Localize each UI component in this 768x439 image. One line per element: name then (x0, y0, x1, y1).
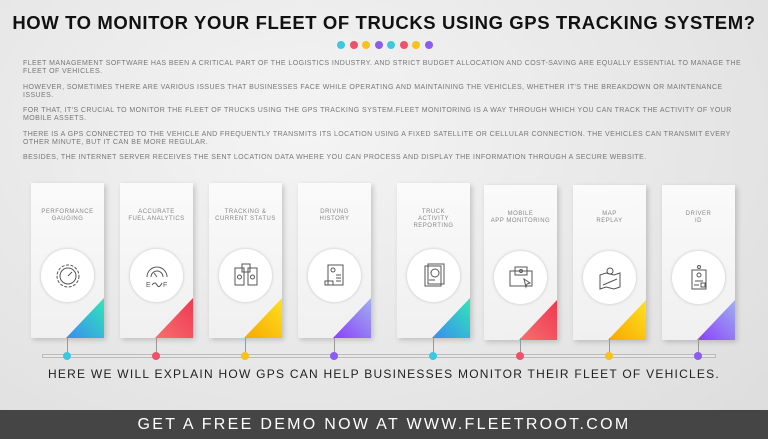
icon: report (407, 249, 460, 302)
icon: fuel gauge (130, 249, 183, 302)
card: tracking (209, 183, 282, 338)
intro text: BESIDES, THE INTERNET SERVER RECEIVES THE SENT LOCATION DATA WHERE YOU CAN PROCESS AND DISPLAY THE INFORMATION THROUGH A SECURE WEBSITE. (23, 154, 647, 161)
icon: fuel gauge: E (146, 282, 150, 288)
intro text: FOR THAT, IT'S CRUCIAL TO MONITOR THE FLEET OF TRUCKS USING THE GPS TRACKING SYSTEM.FLEET MONITORING IS A WAY THROUGH WHICH YOU CAN TRACK THE ACTIVITY OF YOUR MOBILE ASSETS. (23, 107, 732, 122)
card: mobile app: MOBILE (508, 211, 533, 217)
card: truck activity (397, 183, 470, 338)
card: driving history (298, 183, 371, 338)
card: driver id: ID (695, 218, 702, 224)
card: performance gauging (31, 183, 104, 338)
icon: fuel gauge: F (162, 282, 167, 288)
card: fuel analytics: FUEL ANALYTICS (128, 216, 185, 222)
card: tracking: TRACKING & (225, 209, 266, 215)
card: tracking: CURRENT STATUS (215, 216, 276, 222)
card: fuel analytics: ACCURATE (138, 209, 175, 215)
card: driving history: DRIVING (320, 209, 349, 215)
card: map replay: MAP (602, 211, 617, 217)
icon: id badge (672, 251, 725, 304)
card: driving history: HISTORY (320, 216, 349, 222)
icon: map with cursor (494, 251, 547, 304)
card: truck activity: REPORTING (413, 223, 454, 229)
card: map replay (573, 185, 646, 340)
card: performance gauging: PERFORMANCE (41, 209, 94, 215)
timeline (42, 354, 716, 358)
intro text: THERE IS A GPS CONNECTED TO THE VEHICLE AND FREQUENTLY TRANSMITS ITS LOCATION USING A FIXED SATELLITE OR CELLULAR CONNECTION. THE VEHICLES CAN TRANSMIT EVERY OTHER MINUTE, BUT IT CAN BE MORE REGULAR. (23, 130, 731, 146)
icon: document with car (308, 249, 361, 302)
icon: tracking screens (219, 249, 272, 302)
tagline: HERE WE WILL EXPLAIN HOW GPS CAN HELP BUSINESSES MONITOR THEIR FLEET OF VEHICLES. (48, 367, 720, 381)
intro text: HOWEVER, SOMETIMES THERE ARE VARIOUS ISSUES THAT BUSINESSES FACE WHILE OPERATING AND MAINTAINING THE VEHICLES, WHETHER IT'S THE BREAKDOWN OR MAINTENANCE ISSUES. (23, 84, 723, 98)
card: performance gauging: GAUGING (52, 216, 83, 222)
card: fuel analytics (120, 183, 193, 338)
card: mobile app (484, 185, 557, 340)
intro text (23, 60, 741, 161)
icon: gear gauge (41, 249, 94, 302)
card: mobile app: APP MONITORING (491, 218, 550, 224)
footer (0, 410, 768, 439)
footer: GET A FREE DEMO NOW AT WWW.FLEETROOT.COM (138, 416, 630, 433)
decorative colored dots (337, 41, 433, 49)
card: driver id (662, 185, 735, 340)
card: map replay: REPLAY (596, 218, 623, 224)
card: truck activity: TRUCK (422, 209, 445, 215)
intro text: FLEET MANAGEMENT SOFTWARE HAS BEEN A CRITICAL PART OF THE LOGISTICS INDUSTRY. AND STRICT BUDGET ALLOCATION AND COST-SAVING ARE EQUALLY ESSENTIAL TO MANAGE THE FLEET OF VEHICLES. (23, 60, 741, 75)
card: truck activity: ACTIVITY (418, 216, 449, 222)
title: HOW TO MONITOR YOUR FLEET OF TRUCKS USING GPS TRACKING SYSTEM? (12, 12, 756, 33)
icon: map pin (583, 251, 636, 304)
card: driver id: DRIVER (686, 211, 711, 217)
